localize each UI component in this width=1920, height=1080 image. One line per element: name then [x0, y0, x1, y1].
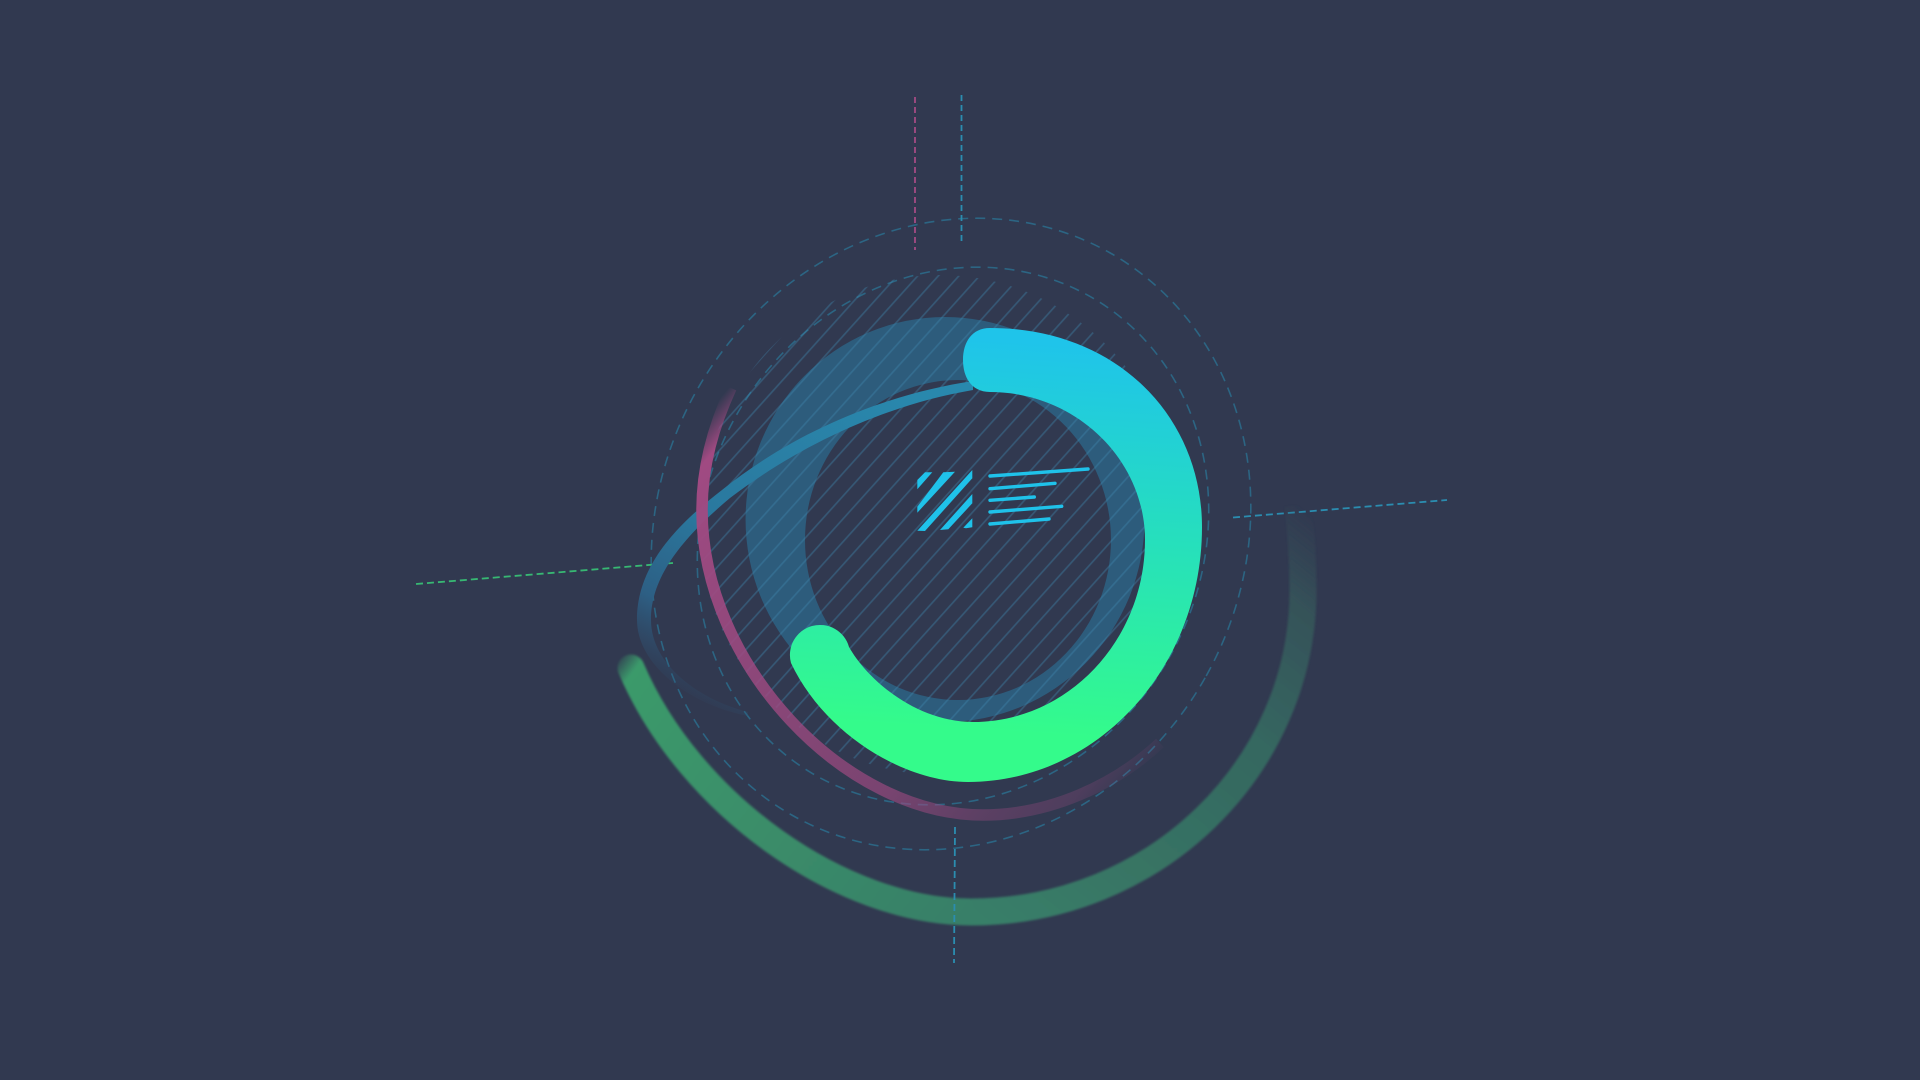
infographic canvas: [416, 95, 1447, 963]
big green arc: [631, 505, 1303, 912]
blue swoosh: [637, 381, 973, 716]
dashed leader: pink top: [914, 97, 916, 250]
icon: striped square: [917, 470, 972, 531]
main gradient ring: [790, 328, 1202, 782]
dashed leader: blue bottom: [954, 827, 955, 963]
translucent blue crescent ring: [746, 317, 1145, 722]
dashed leader: green left: [416, 563, 673, 584]
dashed leader: blue right: [1233, 500, 1447, 518]
pink arc: [702, 388, 1160, 815]
icon: text lines: [990, 469, 1088, 524]
dashed leader: blue top: [960, 95, 962, 243]
hatched disc: [708, 275, 1145, 772]
dashed orbit: outer: [538, 109, 1364, 959]
dashed orbit: inner: [598, 172, 1308, 900]
